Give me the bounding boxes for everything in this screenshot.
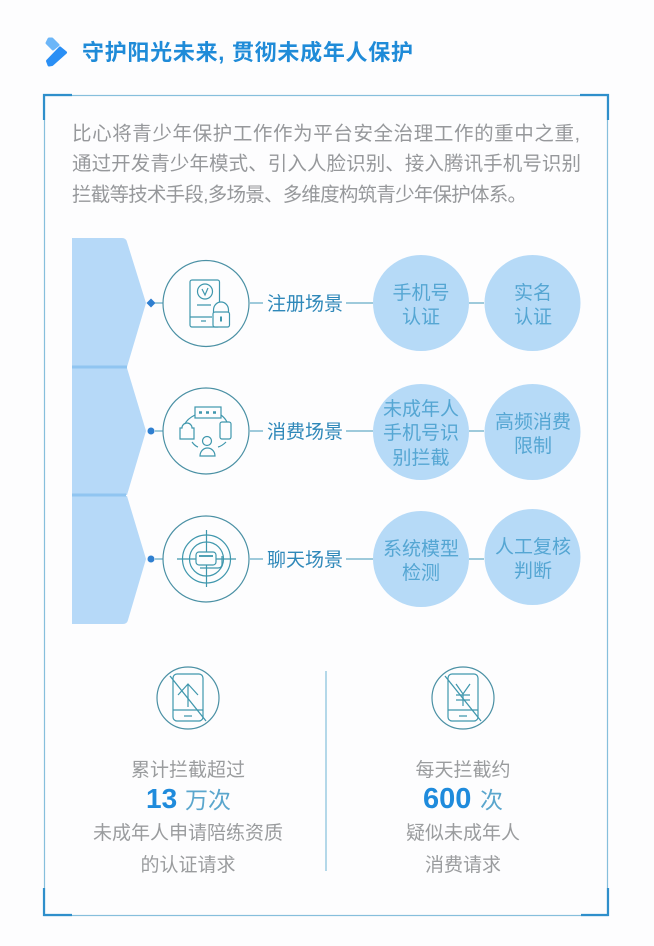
icon: phone with lock xyxy=(163,260,249,346)
stat: 13万次: 累计拦截超过 xyxy=(131,759,245,781)
icon: chat target xyxy=(163,516,249,602)
icon: phone upload blocked xyxy=(157,667,219,729)
bubble: 手机号认证: 手机号 xyxy=(392,282,450,304)
bubble: 人工复核判断: 判断 xyxy=(514,560,552,582)
bubble: 高频消费限制: 高频消费 xyxy=(495,411,571,433)
label: 聊天场景 xyxy=(267,549,343,571)
number: 600 xyxy=(423,783,471,815)
intro text xyxy=(72,123,581,206)
bubble: 高频消费限制 xyxy=(484,384,580,480)
frame xyxy=(44,95,608,916)
stat: 600次: 消费请求 xyxy=(425,854,501,876)
bubble: 未成年人手机号识别拦截: 未成年人 xyxy=(383,398,459,420)
icon: phone payment blocked xyxy=(432,667,494,729)
bubble: 手机号认证 xyxy=(373,255,469,351)
title: 守护阳光未来, 贯彻未成年人保护 xyxy=(82,40,413,65)
bubble: 人工复核判断 xyxy=(484,509,580,605)
bubble: 未成年人手机号识别拦截: 别拦截 xyxy=(392,447,450,469)
intro text: 比心将青少年保护工作作为平台安全治理工作的重中之重, xyxy=(72,123,580,145)
stat: 13万次: 的认证请求 xyxy=(140,854,236,876)
bubble: 未成年人手机号识别拦截: 手机号识 xyxy=(383,422,459,444)
row: 聊天场景 xyxy=(148,509,580,607)
bubble: 实名认证: 认证 xyxy=(514,306,552,328)
row: 注册场景 xyxy=(146,255,580,351)
intro text: 拦截等技术手段,多场景、多维度构筑青少年保护体系。 xyxy=(72,184,527,206)
bubble: 人工复核判断: 人工复核 xyxy=(495,536,571,558)
bubble: 实名认证 xyxy=(484,255,580,351)
stat: 13万次: 万次 xyxy=(185,787,231,813)
icon: title marker xyxy=(47,39,66,65)
panel: left arrow blocks xyxy=(72,238,146,624)
bubble: 手机号认证: 认证 xyxy=(402,306,440,328)
stat: 13万次: 未成年人申请陪练资质 xyxy=(93,822,283,844)
connector dot xyxy=(146,298,484,308)
connector dot xyxy=(148,556,484,562)
stat: 600次 xyxy=(406,667,520,876)
stat: 600次: 每天拦截约 xyxy=(415,759,511,781)
bubble: 系统模型检测 xyxy=(373,511,469,607)
bubble: 实名认证: 实名 xyxy=(514,282,552,304)
bubble: 系统模型检测: 系统模型 xyxy=(383,538,459,560)
icon: payment flow xyxy=(163,388,249,474)
divider xyxy=(325,671,327,871)
label: 消费场景 xyxy=(267,421,343,443)
connector dot xyxy=(148,428,484,434)
bubble: 系统模型检测: 检测 xyxy=(402,562,440,584)
stat: 600次: 次 xyxy=(480,787,503,813)
intro text: 通过开发青少年模式、引入人脸识别、接入腾讯手机号识别 xyxy=(72,153,581,175)
bubble: 未成年人手机号识别拦截 xyxy=(373,384,469,480)
stat: 13万次 xyxy=(93,667,283,876)
row: 消费场景 xyxy=(148,384,580,480)
bubble: 高频消费限制: 限制 xyxy=(514,435,552,457)
stat: 600次: 疑似未成年人 xyxy=(406,822,520,844)
number: 13 xyxy=(146,783,177,814)
label: 注册场景 xyxy=(267,293,343,315)
